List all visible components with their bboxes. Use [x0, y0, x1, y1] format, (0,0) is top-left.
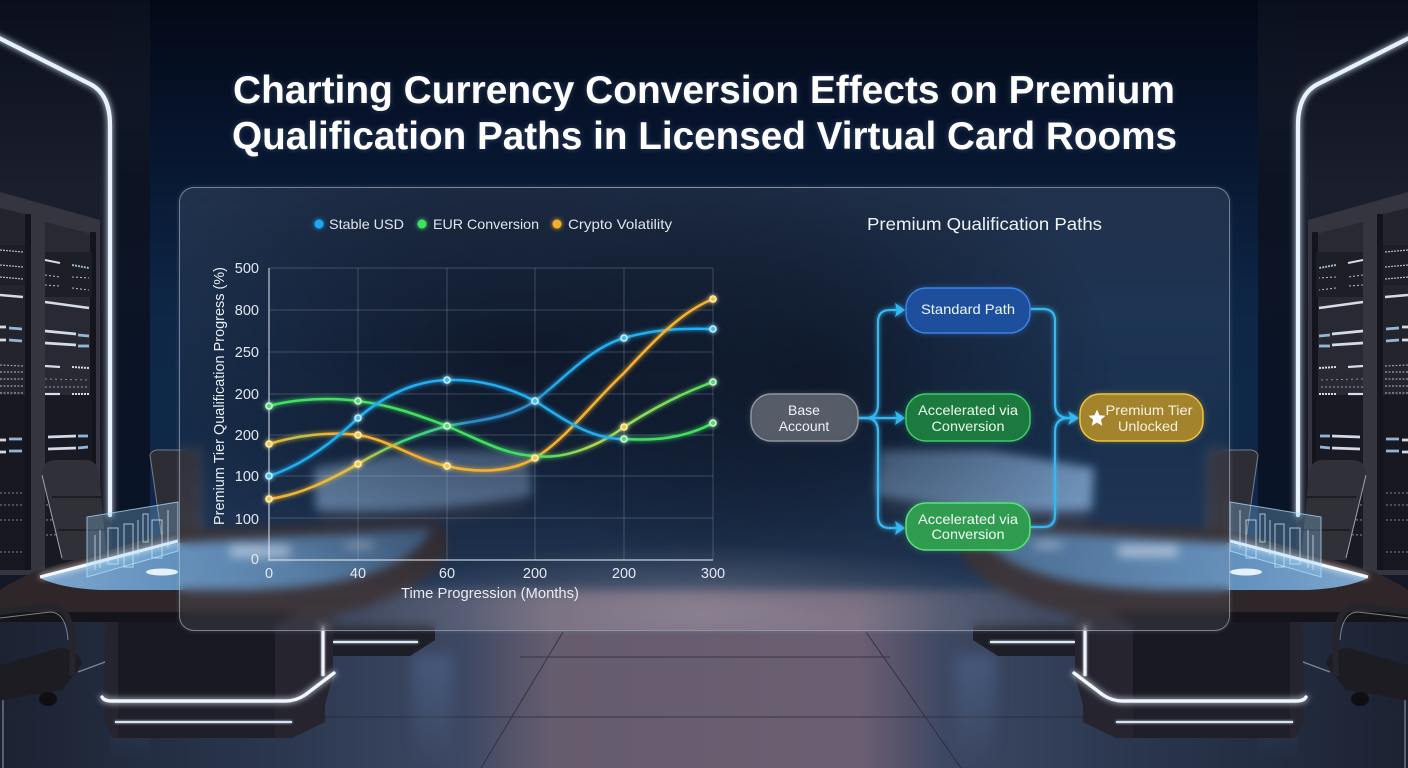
x axis title: Time Progression (Months) — [401, 586, 579, 602]
x axis labels: 60 — [439, 566, 455, 582]
node: Accelerated via Conversion (lower) — [906, 503, 1030, 550]
line: crypto volatility — [269, 299, 713, 471]
heading: Premium Qualification Paths: Premium Qualification Paths — [867, 214, 1102, 234]
panel: glass dashboard — [179, 187, 1230, 631]
y axis labels: 250 — [235, 345, 259, 361]
arrowheads: into paths — [895, 303, 905, 535]
title: Qualification Paths in Licensed Virtual Card Rooms — [232, 115, 1177, 158]
left scene: rack, table, chairs — [0, 0, 532, 768]
node: Base Account: Base — [788, 402, 820, 418]
data points — [266, 296, 716, 502]
line chart — [212, 261, 725, 602]
node: Accelerated via Conversion (upper): Accelerated via — [918, 402, 1018, 418]
y axis labels: 100 — [235, 469, 259, 485]
legend: Crypto Volatility: Crypto Volatility — [568, 216, 672, 232]
y axis labels: 100 — [235, 512, 259, 528]
y axis labels: 200 — [235, 387, 259, 403]
node: Accelerated via Conversion (upper) — [906, 394, 1030, 441]
node: Base Account — [751, 394, 858, 441]
x axis labels: 200 — [612, 566, 636, 582]
arrows: base account to paths — [858, 310, 900, 528]
line: stable USD — [269, 380, 713, 476]
y axis labels: 0 — [251, 552, 259, 568]
icon: star — [1088, 410, 1106, 426]
x axis labels: 200 — [523, 566, 547, 582]
flow diagram — [751, 288, 1203, 550]
title: Charting Currency Conversion Effects on Premium — [233, 69, 1175, 112]
x axis labels: 0 — [265, 566, 273, 582]
x axis labels — [265, 566, 725, 582]
y axis labels: 500 — [235, 261, 259, 277]
node: Accelerated via Conversion (lower): Conversion — [932, 526, 1004, 542]
x axis labels: 40 — [350, 566, 366, 582]
y axis labels: 800 — [235, 303, 259, 319]
line: EUR conversion — [269, 382, 713, 457]
legend: Stable USD: Stable USD — [329, 216, 404, 232]
node: Base Account: Account — [779, 418, 829, 434]
arrows: paths to premium tier — [1030, 309, 1074, 527]
node: Standard Path — [906, 288, 1030, 333]
arrowhead: into premium tier — [1068, 411, 1079, 425]
node: Premium Tier Unlocked — [1080, 394, 1203, 441]
line: lower crossover to blue — [269, 329, 713, 499]
node: Premium Tier Unlocked: Unlocked — [1118, 418, 1178, 434]
node: Standard Path: Standard Path — [921, 301, 1015, 317]
node: Accelerated via Conversion (lower): Accelerated via — [918, 511, 1018, 527]
y axis title: Premium Tier Qualification Progress (%) — [212, 267, 228, 525]
right scene: rack, table, chairs — [876, 0, 1408, 768]
x axis labels: 300 — [701, 566, 725, 582]
y axis labels — [235, 261, 259, 568]
y axis labels: 200 — [235, 428, 259, 444]
chart legend — [314, 216, 672, 232]
node: Accelerated via Conversion (upper): Conversion — [932, 418, 1004, 434]
legend: EUR Conversion: EUR Conversion — [433, 216, 539, 232]
title — [231, 69, 1178, 158]
node: Premium Tier Unlocked: Premium Tier — [1106, 402, 1193, 418]
floor — [0, 590, 1408, 768]
